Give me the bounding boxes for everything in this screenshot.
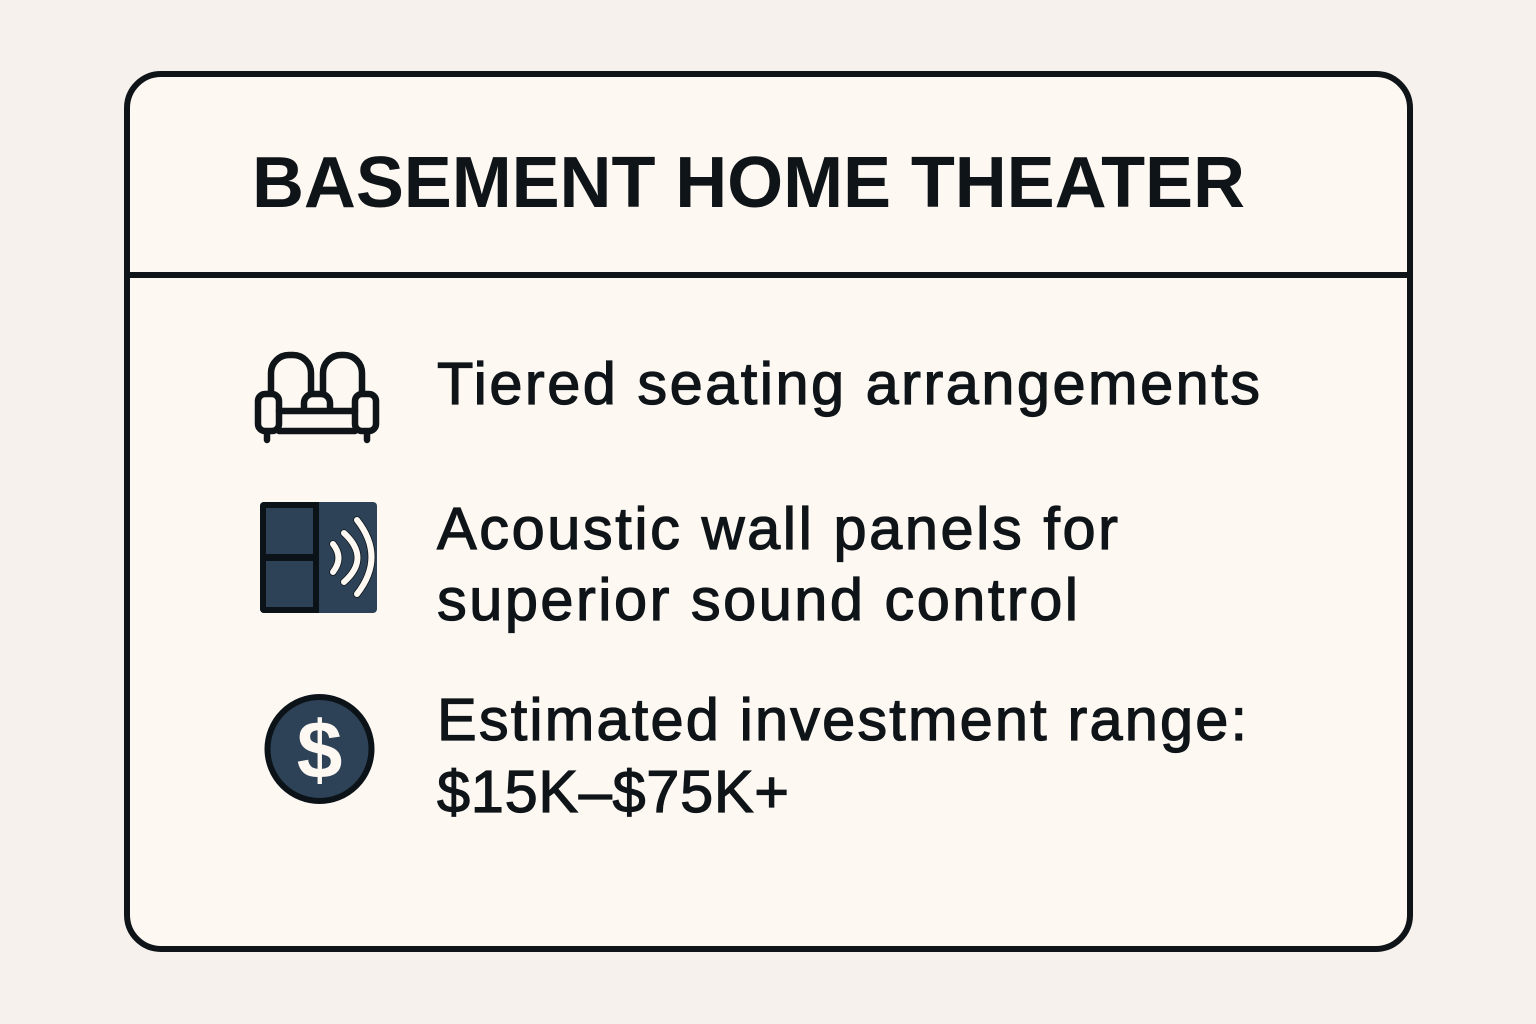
text: acoustic panels: Acoustic wall panels for <box>437 495 1118 562</box>
text: acoustic panels <box>437 495 1118 633</box>
text: acoustic panels: superior sound control <box>437 566 1078 633</box>
text: investment range: $15K–$75K+ <box>437 758 789 825</box>
text: investment range: Estimated investment range: <box>437 686 1247 753</box>
icon: acoustic wall panel <box>260 502 377 613</box>
icon: theater seats <box>258 355 376 440</box>
text: tiered seating: Tiered seating arrangements <box>437 350 1260 417</box>
icon: dollar coin <box>268 697 372 801</box>
panel: basement home theater card <box>127 74 1410 949</box>
text: investment range <box>437 686 1247 825</box>
icon: dollar coin: $ <box>297 705 342 796</box>
title: BASEMENT HOME THEATER <box>252 143 1245 223</box>
